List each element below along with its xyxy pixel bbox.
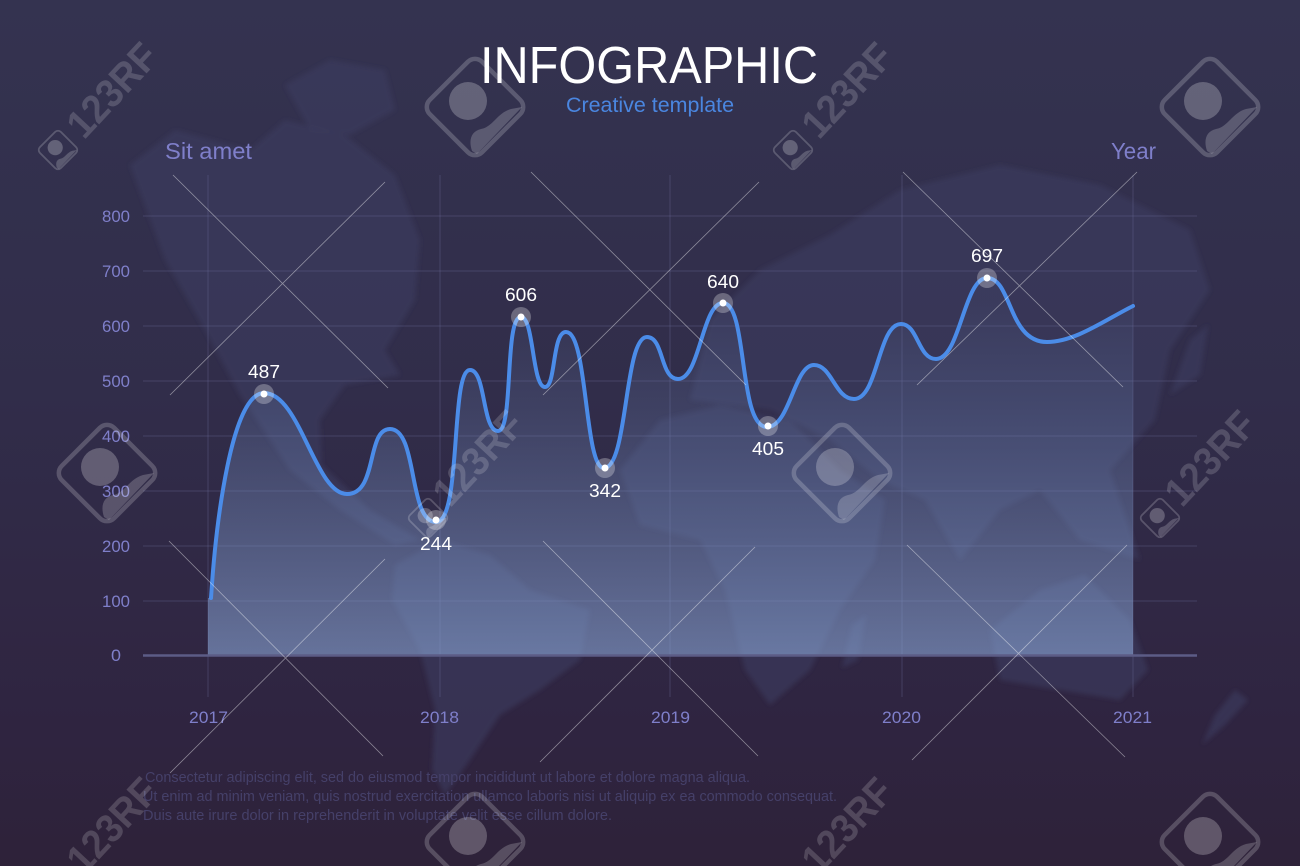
footer text: Consectetur adipiscing elit, sed do eiusmod tempor incididunt ut labore et dolore magna aliqua.: [145, 770, 750, 786]
y axis labels: 800: [102, 207, 130, 226]
footer text: [143, 770, 837, 824]
map: new zealand: [1202, 690, 1248, 745]
x axis labels: [189, 708, 1152, 727]
map: japan: [1170, 325, 1208, 395]
x axis labels: 2020: [882, 708, 921, 727]
watermark wordmarks: 123RF: [793, 35, 902, 147]
point 405: 405: [752, 439, 784, 459]
data markers and values: [248, 246, 1003, 554]
point 640: [707, 272, 739, 313]
footer text: Duis aute irure dolor in reprehenderit in voluptate velit esse cillum dolore.: [143, 808, 612, 824]
map: greenland: [285, 60, 395, 135]
map: madagascar: [842, 615, 866, 668]
point 487: 487: [248, 362, 280, 382]
data line: [211, 278, 1133, 598]
point 405: [752, 416, 784, 459]
area under the curve: [208, 278, 1133, 655]
y axis title: Sit amet: [165, 138, 253, 164]
y axis labels: 200: [102, 537, 130, 556]
y axis labels: 600: [102, 317, 130, 336]
map: africa: [620, 405, 885, 705]
y axis labels: 0: [111, 646, 121, 665]
y axis labels: [102, 207, 130, 665]
grid lines: [143, 175, 1197, 697]
map: north america: [130, 120, 420, 545]
point 342: 342: [589, 481, 621, 501]
watermark wordmarks: 123RF: [1156, 403, 1265, 515]
point 342: [589, 458, 621, 501]
y axis labels: 700: [102, 262, 130, 281]
point 697: 697: [971, 246, 1003, 266]
x axis labels: 2021: [1113, 708, 1152, 727]
x axis title: Year: [1111, 138, 1156, 164]
point 640: 640: [707, 272, 739, 292]
footer text: Ut enim ad minim veniam, quis nostrud exercitation ullamco laboris nisi ut aliquip ex ea commodo consequat.: [143, 789, 837, 805]
x axis labels: 2019: [651, 708, 690, 727]
point 244: 244: [420, 534, 452, 554]
y axis labels: 300: [102, 482, 130, 501]
x axis labels: 2017: [189, 708, 228, 727]
world map: [130, 60, 1248, 795]
watermark egg icons, small: [37, 129, 1181, 539]
y axis labels: 400: [102, 427, 130, 446]
y axis labels: 100: [102, 592, 130, 611]
subtitle: Creative template: [566, 94, 734, 117]
watermark wordmarks: 123RF: [424, 403, 533, 515]
watermark wordmarks: 123RF: [58, 35, 167, 147]
x axis labels: 2018: [420, 708, 459, 727]
y axis labels: 500: [102, 372, 130, 391]
point 606: [505, 285, 537, 327]
map: eurasia: [690, 165, 1210, 560]
diagonal crosses: [169, 172, 1137, 773]
map: australia: [990, 575, 1148, 700]
map: south america: [392, 540, 590, 795]
point 487: [248, 362, 280, 404]
x axis baseline: [143, 654, 1197, 657]
point 244: [420, 510, 452, 554]
point 697: [971, 246, 1003, 288]
point 606: 606: [505, 285, 537, 305]
title: INFOGRAPHIC: [480, 37, 818, 95]
